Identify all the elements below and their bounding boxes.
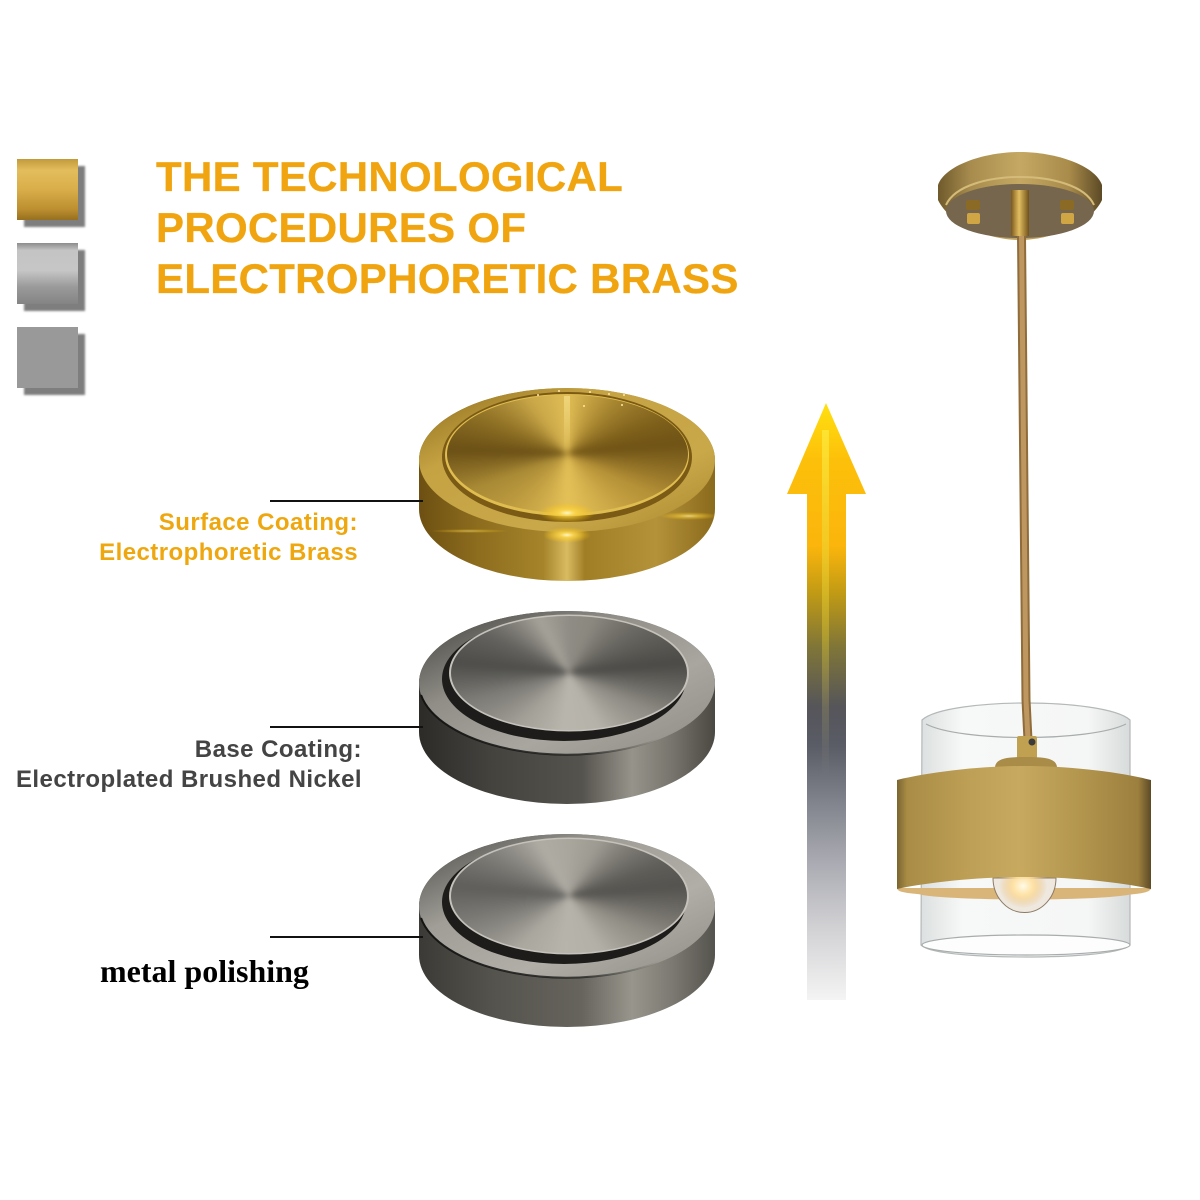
leader line: base coating [270,726,423,728]
leader line: surface coating [270,500,423,502]
layer: metal polishing disc [419,834,715,1027]
layer: base coating disc [419,611,715,804]
layer: surface coating disc [419,388,715,581]
swatch: brushed nickel colour [17,243,78,304]
title [156,153,739,302]
leader line: metal polishing [270,936,423,938]
label: base coating: Base Coating: [195,736,362,763]
label: surface coating [99,509,358,566]
label: base coating [16,736,362,793]
title: PROCEDURES OF [156,204,526,251]
swatch: polished metal colour [17,327,78,388]
label: metal polishing: metal polishing [100,953,309,989]
glass shade [921,703,1130,957]
inner reflector and bulb [897,864,1151,913]
lamp holder [995,736,1057,767]
label: base coating: Electroplated Brushed Nickel [16,766,362,793]
label: surface coating: Surface Coating: [159,509,358,536]
ceiling canopy [938,152,1102,240]
power cord [1022,236,1028,740]
swatch: brass colour [17,159,78,220]
arrow: process direction [787,403,866,1000]
pendant lamp product [897,152,1151,958]
label: surface coating: Electrophoretic Brass [99,539,358,566]
title: THE TECHNOLOGICAL [156,153,623,200]
brass band [897,766,1151,889]
title: ELECTROPHORETIC BRASS [156,255,739,302]
